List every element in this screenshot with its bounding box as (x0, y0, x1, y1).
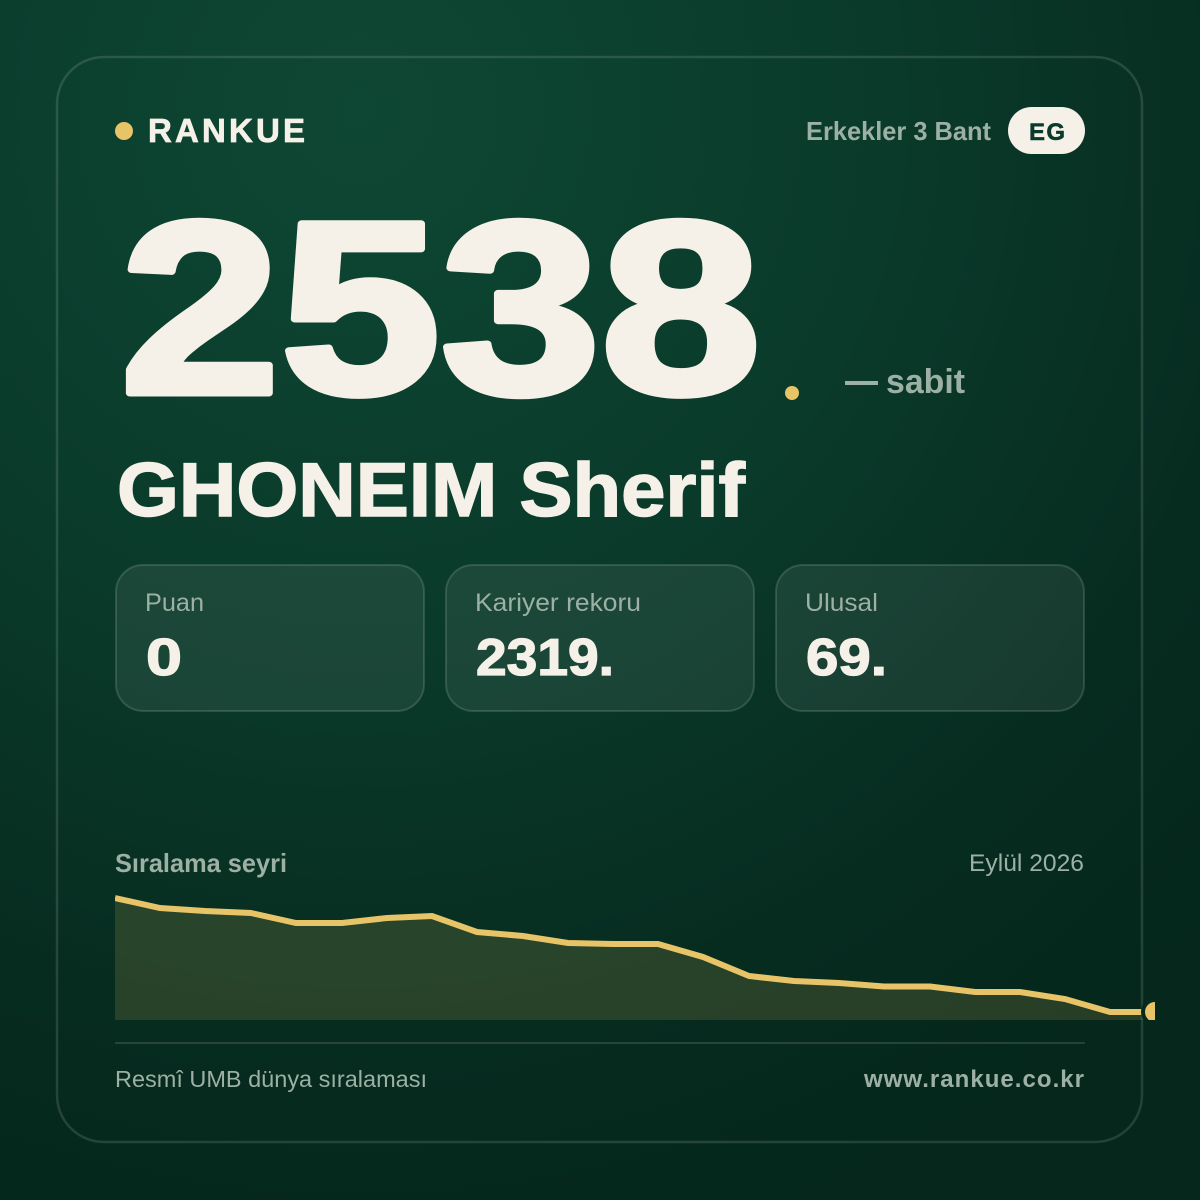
rank change: sabit (886, 363, 965, 401)
panel: national rank stat: Ulusal (805, 589, 878, 617)
brand name: RANKUE (148, 112, 305, 149)
chart heading: Sıralama seyri (115, 848, 287, 878)
panel: national rank stat (776, 565, 1084, 711)
panel: national rank stat: 69. (806, 629, 887, 687)
country pill: EG (1029, 119, 1065, 146)
player name: GHONEIM Sherif (117, 448, 746, 533)
panel: career high stat (446, 565, 754, 711)
icon: brand dot (115, 122, 133, 140)
panel: points stat (116, 565, 424, 711)
area line chart: ranking trend (115, 898, 1167, 1024)
panel: career high stat: Kariyer rekoru (475, 589, 641, 617)
panel: points stat: Puan (145, 589, 204, 617)
header: brand (115, 112, 305, 149)
category label: Erkekler 3 Bant (806, 116, 991, 146)
panel: career high stat: 2319. (476, 629, 614, 687)
footer website: www.rankue.co.kr (863, 1066, 1084, 1093)
panel: points stat: 0 (146, 629, 182, 687)
header: category and country (806, 107, 1085, 154)
rank change (845, 363, 965, 401)
big rank number: 2538 (120, 171, 761, 446)
footer source note: Resmî UMB dünya sıralaması (115, 1066, 427, 1092)
icon: rank dot (785, 386, 799, 400)
chart date: Eylül 2026 (969, 850, 1084, 877)
country pill (1008, 107, 1085, 154)
